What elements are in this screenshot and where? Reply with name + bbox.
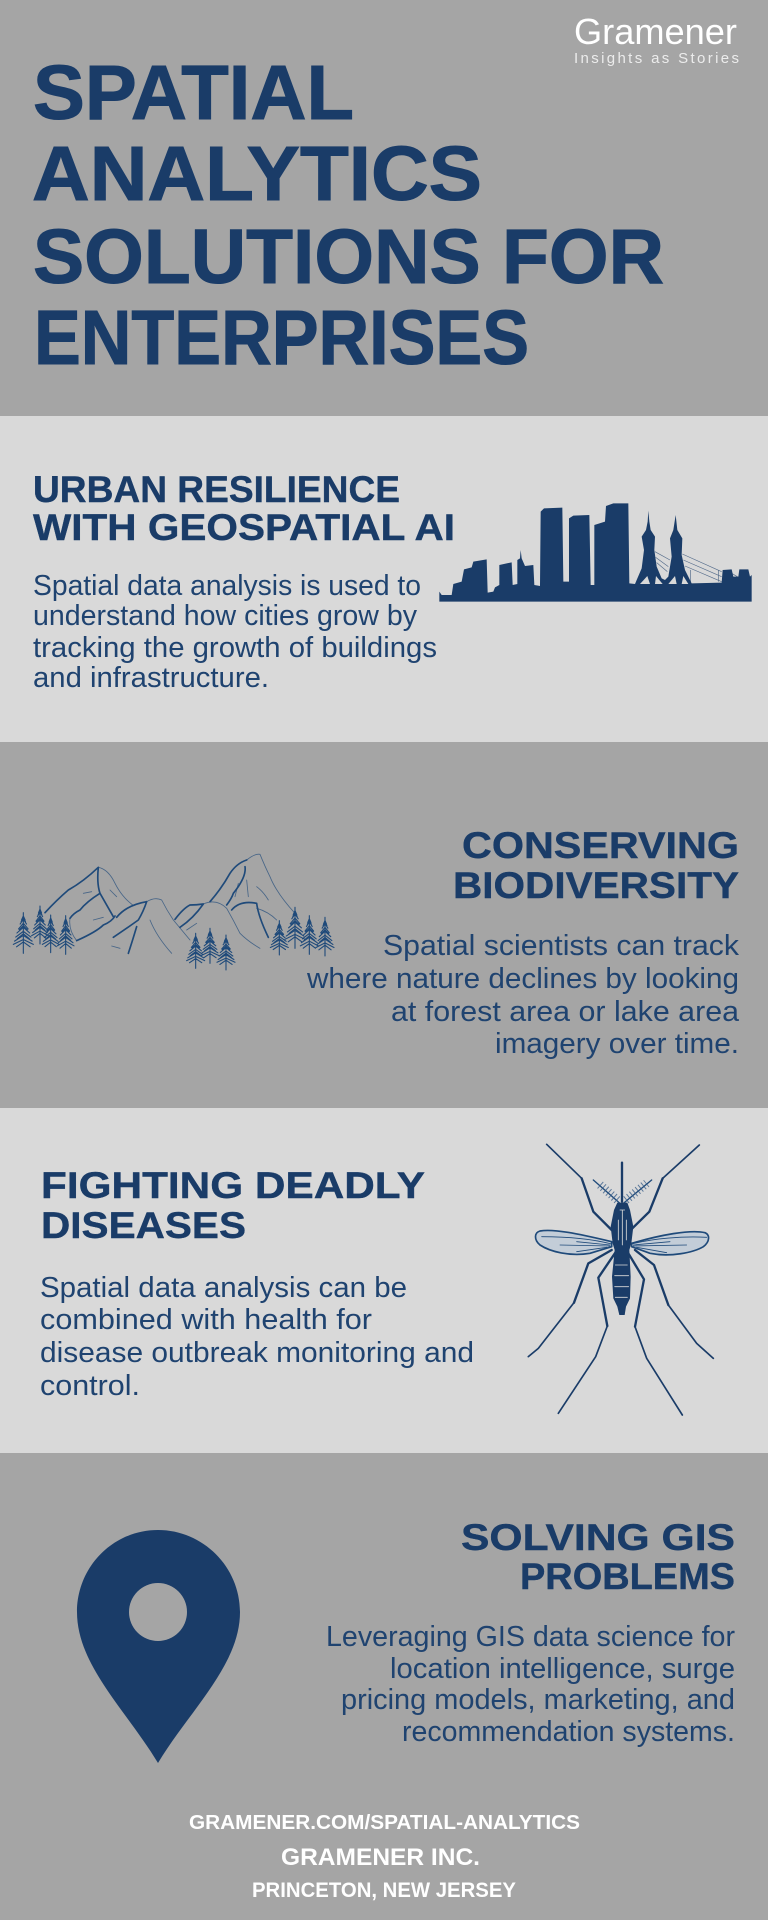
text: urban resilience body: understand how cities grow by	[33, 600, 417, 632]
title: SOLUTIONS FOR	[33, 214, 664, 300]
title: SPATIAL	[33, 50, 354, 136]
heading: solving GIS problems	[461, 1517, 735, 1597]
text: biodiversity body: at forest area or lake area	[391, 996, 740, 1028]
text: urban resilience body	[33, 570, 437, 694]
text: biodiversity body: where nature declines by looking	[306, 963, 739, 995]
panel: urban resilience	[0, 416, 768, 742]
logo: Gramener: Gramener	[574, 11, 737, 52]
heading: solving GIS problems: SOLVING GIS	[461, 1517, 735, 1558]
panel: solving GIS problems	[0, 1453, 768, 1920]
title: ENTERPRISES	[34, 295, 529, 381]
text: GIS body: recommendation systems.	[402, 1716, 735, 1748]
panel: conserving biodiversity	[0, 742, 768, 1108]
text: GIS body: pricing models, marketing, and	[341, 1684, 735, 1716]
footer: PRINCETON, NEW JERSEY	[252, 1879, 516, 1902]
heading: conserving biodiversity: BIODIVERSITY	[453, 865, 739, 906]
heading: urban resilience	[33, 469, 455, 548]
panel: fighting deadly diseases	[0, 1108, 768, 1453]
heading: fighting deadly diseases	[41, 1165, 425, 1246]
heading: conserving biodiversity	[453, 825, 739, 906]
text: urban resilience body: tracking the growth of buildings	[33, 632, 437, 664]
heading: conserving biodiversity: CONSERVING	[462, 825, 739, 866]
heading: urban resilience: URBAN RESILIENCE	[33, 469, 400, 510]
text: urban resilience body: and infrastructure.	[33, 662, 269, 694]
text: diseases body: disease outbreak monitoring and	[40, 1337, 474, 1369]
text: diseases body: combined with health for	[40, 1304, 372, 1336]
text: biodiversity body: Spatial scientists can track	[383, 930, 740, 962]
heading: urban resilience: WITH GEOSPATIAL AI	[33, 507, 455, 548]
heading: solving GIS problems: PROBLEMS	[520, 1556, 735, 1597]
text: GIS body: location intelligence, surge	[390, 1653, 735, 1685]
title	[32, 50, 664, 381]
footer: GRAMENER INC.	[281, 1844, 480, 1871]
icon: mosquito	[528, 1144, 713, 1415]
heading: fighting deadly diseases: DISEASES	[41, 1205, 246, 1246]
text: diseases body: Spatial data analysis can be	[40, 1272, 407, 1304]
footer	[189, 1812, 580, 1902]
panel: header	[0, 0, 768, 416]
text: biodiversity body	[306, 930, 740, 1060]
icon: location pin	[77, 1530, 240, 1763]
text: diseases body	[40, 1272, 474, 1402]
text: biodiversity body: imagery over time.	[495, 1028, 739, 1060]
title: ANALYTICS	[32, 131, 482, 217]
text: GIS body	[326, 1621, 735, 1748]
icon: city skyline	[439, 503, 752, 602]
text: urban resilience body: Spatial data analysis is used to	[33, 570, 421, 602]
footer: GRAMENER.COM/SPATIAL-ANALYTICS	[189, 1812, 580, 1834]
text: GIS body: Leveraging GIS data science for	[326, 1621, 735, 1653]
logo: Gramener: Insights as Stories	[574, 50, 739, 67]
text: diseases body: control.	[40, 1370, 140, 1402]
icon: mountains and trees	[13, 854, 334, 970]
heading: fighting deadly diseases: FIGHTING DEADLY	[41, 1165, 425, 1206]
